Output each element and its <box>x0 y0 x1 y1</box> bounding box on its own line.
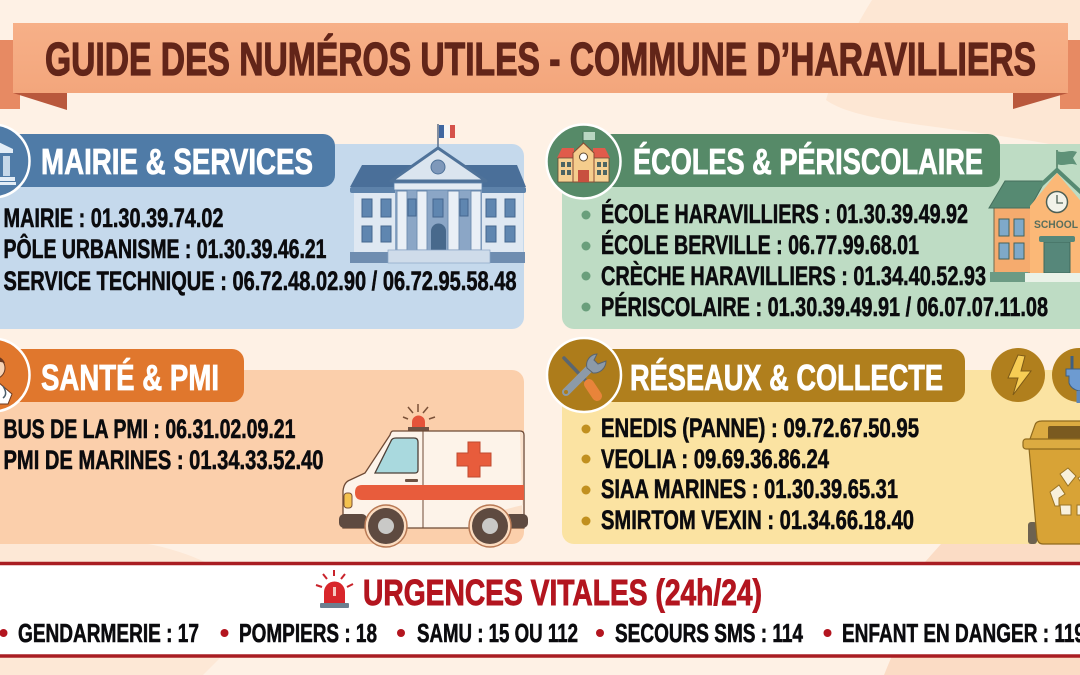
text block: numéros santé <box>4 414 324 475</box>
icon: mairie badge <box>0 124 30 198</box>
panel: écoles et périscolaire <box>546 124 1080 329</box>
list: numéros d'urgence: SECOURS SMS : 114 <box>615 618 803 648</box>
list: numéros réseaux: SIAA MARINES : 01.30.39.65.31 <box>601 474 898 504</box>
panel: santé et PMI <box>0 338 528 547</box>
icon: outils badge <box>547 338 621 412</box>
icon: gyrophare <box>316 570 353 608</box>
text block: numéros mairie: MAIRIE : 01.30.39.74.02 <box>4 203 224 233</box>
text block: numéros mairie <box>4 203 516 296</box>
icon: poubelle de recyclage <box>1023 421 1080 544</box>
list: numéros réseaux: ENEDIS (PANNE) : 09.72.67.50.95 <box>601 413 919 443</box>
text block: numéros mairie: PÔLE URBANISME : 01.30.39.46.21 <box>4 233 326 264</box>
icon: éclair <box>991 348 1045 402</box>
heading: mairie et services: MAIRIE & SERVICES <box>41 141 313 182</box>
list: numéros écoles: ÉCOLE BERVILLE : 06.77.99.68.01 <box>601 229 919 260</box>
icon: ambulance <box>339 404 528 547</box>
text block: numéros santé: BUS DE LA PMI : 06.31.02.09.21 <box>4 414 296 444</box>
heading: santé et PMI: SANTÉ & PMI <box>41 357 219 398</box>
list: numéros d'urgence: GENDARMERIE : 17 <box>18 618 199 648</box>
icon: école badge <box>546 124 620 198</box>
panel: réseaux et collecte <box>547 338 1080 544</box>
heading: urgences vitales: URGENCES VITALES (24h/24) <box>363 572 762 613</box>
panel: urgences vitales <box>0 564 1080 656</box>
list: numéros réseaux: VEOLIA : 09.69.36.86.24 <box>601 444 829 474</box>
list: numéros d'urgence <box>0 618 1080 648</box>
icon: bâtiment école <box>989 150 1080 282</box>
panel: mairie et services <box>0 124 526 329</box>
list: numéros réseaux <box>582 413 919 535</box>
list: numéros réseaux: SMIRTOM VEXIN : 01.34.66.18.40 <box>601 505 914 535</box>
text block: numéros santé: PMI DE MARINES : 01.34.33.52.40 <box>4 445 324 475</box>
icon: médecin badge <box>0 338 30 412</box>
list: numéros écoles <box>582 198 1048 322</box>
text block: numéros mairie: SERVICE TECHNIQUE : 06.72.48.02.90 / 06.72.95.58.48 <box>4 266 516 296</box>
icon: bâtiment école: SCHOOL <box>1034 219 1078 231</box>
title banner <box>0 23 1080 110</box>
heading: réseaux et collecte: RÉSEAUX & COLLECTE <box>630 357 943 398</box>
icon: prise électrique <box>1052 348 1080 403</box>
list: numéros d'urgence: SAMU : 15 OU 112 <box>417 618 578 648</box>
icon: bâtiment de la mairie <box>350 124 526 263</box>
list: numéros d'urgence: POMPIERS : 18 <box>239 618 377 648</box>
